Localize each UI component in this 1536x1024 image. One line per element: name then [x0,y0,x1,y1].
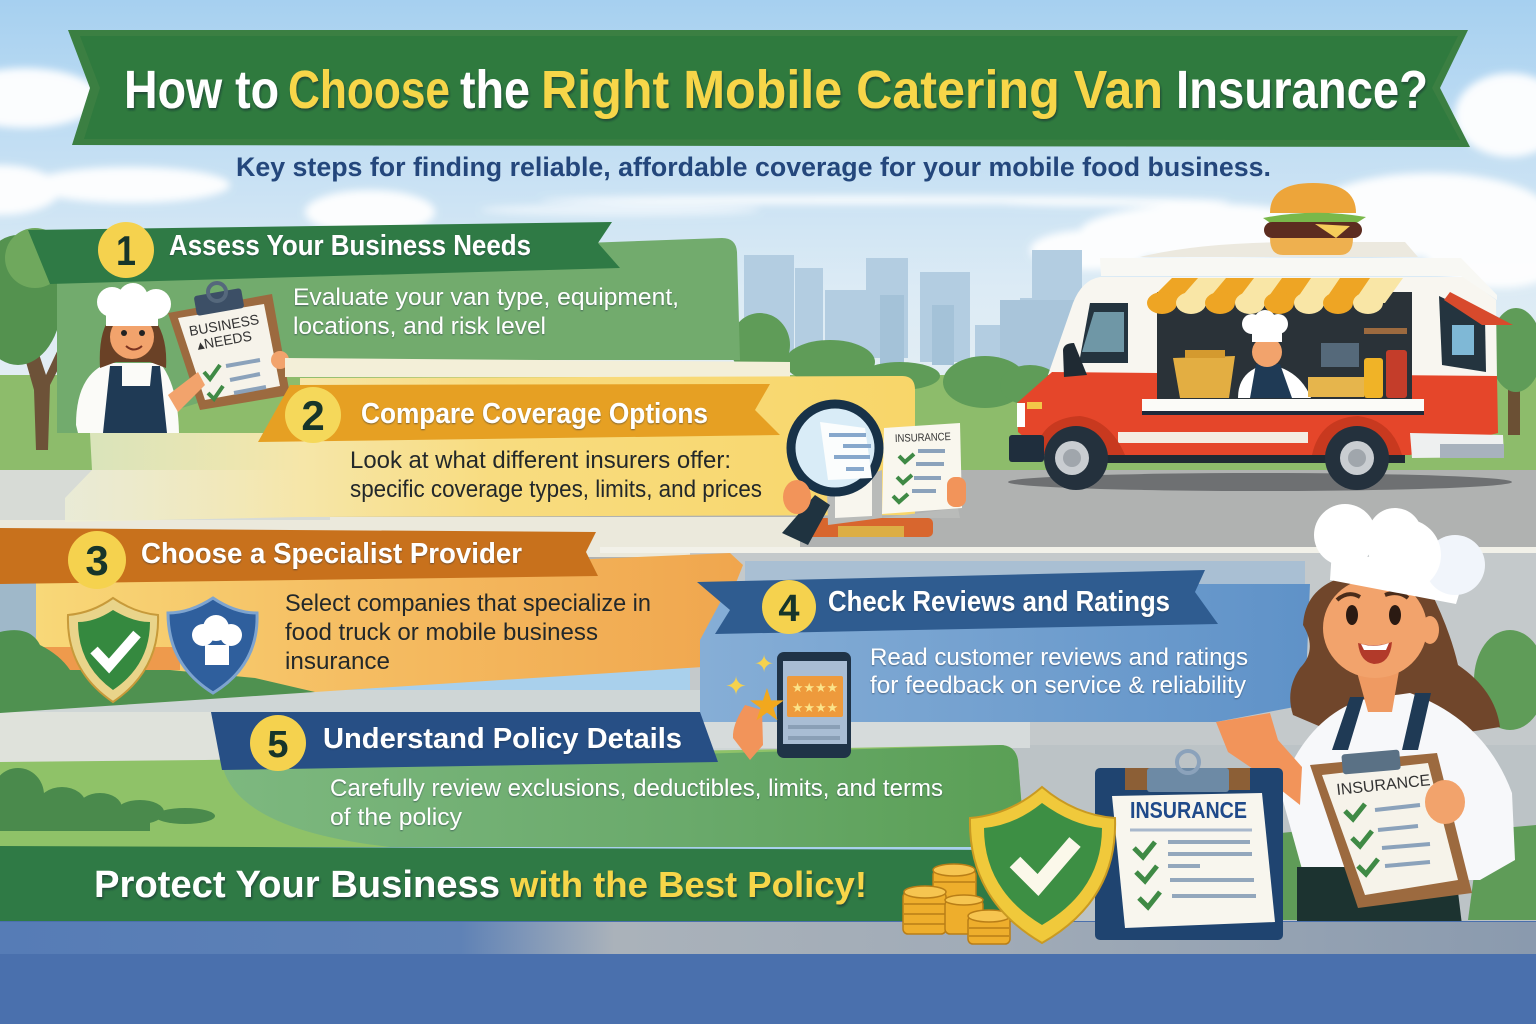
badge 1: 1 [116,227,136,274]
body 4: Read customer reviews and ratings [870,644,1248,671]
title text: Choose [288,60,450,120]
panel 4: reviews and ratings [697,570,1310,722]
ribbon 5 [211,712,718,770]
heading 1: Assess Your Business Needs [169,230,531,262]
panel 4: reviews and ratings: for feedback on service & reliability [870,672,1246,699]
ribbon 1 [28,222,620,284]
icon: green shield with check [68,598,158,702]
badge 5 [250,715,306,771]
badge 2: 2 [301,392,325,439]
illustration: phone with star ratings: ★★★★ [792,680,838,695]
title text [124,60,1428,120]
bottom blue band [0,921,1536,1024]
title text: How to [124,60,279,120]
illustration: phone with star ratings: ★ [747,681,787,730]
wheel arches [1035,416,1125,455]
body 5: Carefully review exclusions, deductibles, limits, and terms [330,775,943,802]
illustration: magnifier over insurance booklet: INSURANCE [895,431,951,445]
ground shadow [1008,473,1512,491]
body 1: Evaluate your van type, equipment, [293,284,679,311]
title text: Insurance? [1176,60,1428,120]
bushes [730,308,1536,435]
ribbon 3 [0,528,598,584]
road lines and lower background [0,470,1536,925]
rear awning [1444,292,1513,325]
windows [1157,292,1412,399]
panel 3: specialist provider: food truck or mobile business [285,619,598,646]
illustration: chef with business needs clipboard: BUSINESS [188,311,260,339]
pointing arm [1216,713,1302,805]
burger [1263,183,1366,255]
gold coins [903,864,1010,944]
title text: the [460,60,530,120]
insurance clipboard [1095,751,1283,940]
heading 3: Choose a Specialist Provider [141,538,522,570]
bottom banner [0,846,1030,921]
underside [1045,455,1405,463]
banner text: Protect Your Business [94,864,500,906]
counter [1142,399,1424,411]
bottom banner: with the Best Policy! [509,864,867,905]
left tree [0,228,92,470]
bumpers [1009,435,1044,462]
chef coat [1280,693,1515,880]
illustration: phone with star ratings: ✦ [754,651,774,678]
chef neck and face [1355,665,1400,712]
large shield with check [970,787,1115,943]
badge 2 [285,387,341,443]
cook and goods [1173,356,1235,398]
panel 3: specialist provider: insurance [285,648,390,675]
title text: Right Mobile Catering Van [541,60,1163,120]
panel 2: compare coverage [65,358,966,545]
icon: blue shield with chef hat [168,598,257,693]
heading 4: Check Reviews and Ratings [828,586,1170,618]
right shrubs [1115,630,1536,920]
shelf band [0,922,1536,954]
illustration: chef with business needs clipboard: ▴NEEDS [196,328,253,353]
panel 5: policy details [0,712,1025,847]
illustration: magnifier over insurance booklet [782,404,966,545]
badge 3: 3 [85,537,109,584]
panel 1: assess business needs [28,222,740,433]
subtitle: Key steps for finding reliable, affordable coverage for your mobile food business. [236,152,1271,182]
chef hat [1330,550,1465,604]
badge 3 [68,531,126,589]
sky background [0,0,1536,480]
panel 3: specialist provider [0,528,743,713]
insurance clipboard: INSURANCE [1130,797,1247,823]
panel 1: assess business needs: locations, and risk level [293,313,546,340]
heading 5: Understand Policy Details [323,723,682,755]
badge 5: 5 [267,724,289,766]
clouds [0,68,1536,288]
van body [1048,277,1497,380]
large chef [1216,504,1515,925]
wheels [1044,426,1108,490]
body 2: Look at what different insurers offer: [350,447,731,474]
chef hair [1290,578,1500,735]
illustration: phone with star ratings: ✦ [725,671,747,701]
panel 5: policy details: of the policy [330,804,462,831]
awning [1147,278,1403,314]
chef clipboard [1310,750,1472,908]
panel 2: compare coverage: specific coverage types, limits, and prices [350,476,762,503]
park ground [0,375,1536,475]
city skyline [744,250,1082,380]
badge 1 [98,222,154,278]
badge 4 [762,580,816,634]
left bushes [0,768,215,831]
heading 2: Compare Coverage Options [361,398,708,430]
road [0,470,1536,590]
illustration: phone with star ratings: ★★★★ [792,700,838,715]
badge 4: 4 [778,588,800,630]
ribbon 2 [258,384,780,442]
ribbon 4 [697,570,1218,634]
illustration: phone with star ratings [725,651,851,760]
chef clipboard: INSURANCE [1336,772,1431,799]
illustration: chef with business needs clipboard [76,283,290,433]
body 3: Select companies that specialize in [285,590,651,617]
title banner [68,30,1470,147]
food truck [1008,183,1513,491]
